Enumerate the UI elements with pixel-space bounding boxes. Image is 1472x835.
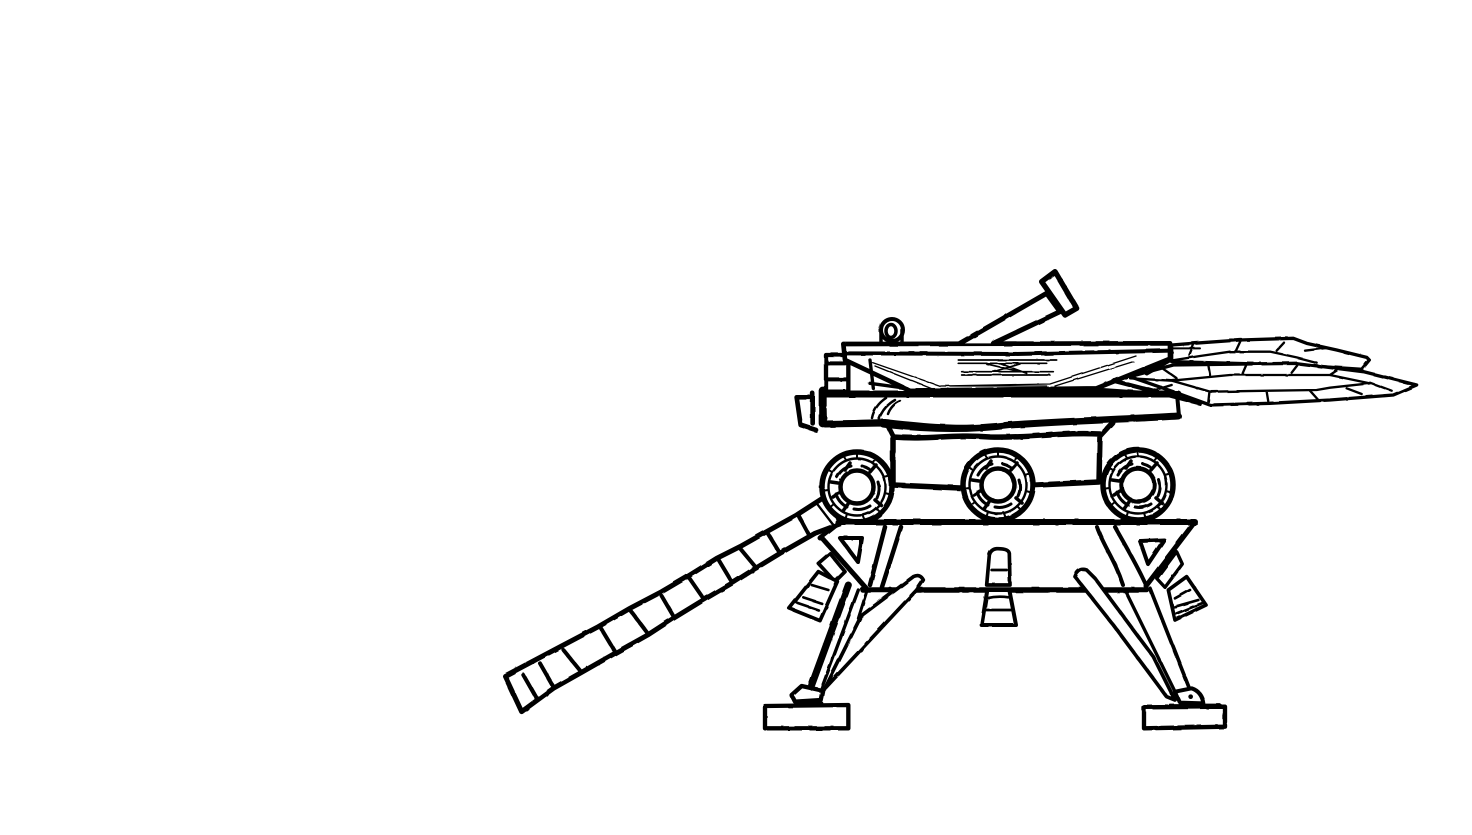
- hatch handle: [960, 272, 1077, 343]
- rover platform: [824, 394, 1179, 429]
- top solar panel box: [843, 343, 1170, 391]
- wheel: left: [822, 452, 892, 522]
- panel emblem: [958, 360, 1057, 375]
- upper wing: [1171, 338, 1369, 369]
- right triangle: [1146, 523, 1194, 586]
- right ankle: [1170, 688, 1220, 705]
- left triangle: [820, 522, 866, 588]
- lander deck: [820, 522, 1195, 590]
- centre thruster: [982, 549, 1016, 625]
- wheel: centre: [963, 450, 1033, 520]
- wing connectors: [1090, 348, 1200, 403]
- left foot pad: [765, 705, 848, 728]
- rover lower body: [887, 423, 1113, 488]
- right foot pad: [1144, 707, 1225, 728]
- right thruster: [1157, 552, 1206, 620]
- ring antenna: [881, 319, 903, 342]
- wheel: right: [1103, 450, 1173, 520]
- left landing leg: [812, 576, 923, 688]
- front clip: [797, 393, 816, 430]
- right landing leg: [1075, 569, 1189, 700]
- lower wing: [1130, 363, 1417, 405]
- front blocks: [823, 355, 848, 423]
- left thruster: [789, 553, 845, 621]
- ramp ladder: [505, 497, 842, 712]
- left ankle: [792, 686, 823, 703]
- right wing panels: [1130, 338, 1417, 405]
